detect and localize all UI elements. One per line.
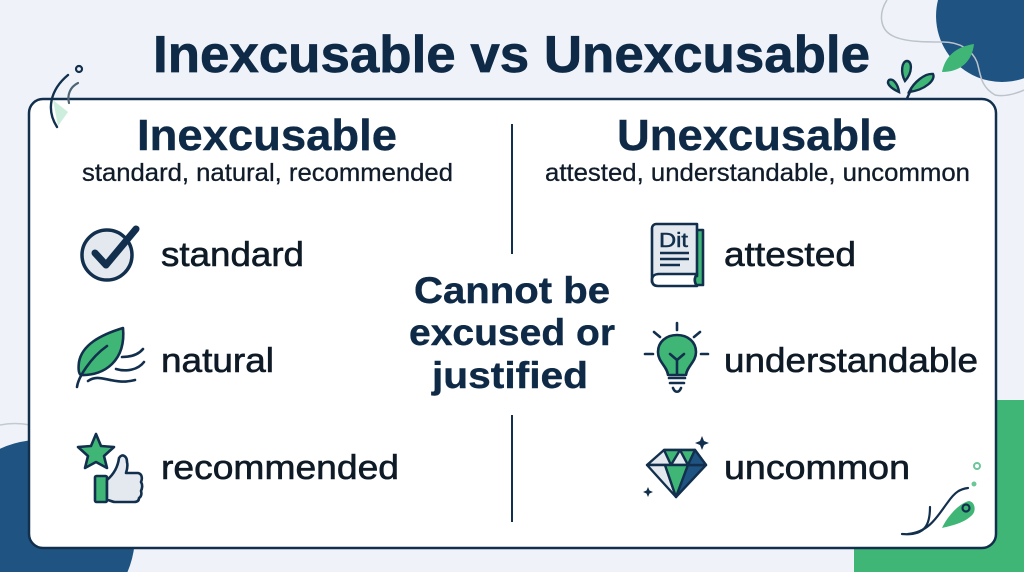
decoration: bottom-right green block — [854, 400, 1024, 572]
right column subtitle: attested, understandable, uncommon — [545, 159, 970, 187]
decoration: top-right blue circle and leaf — [881, 0, 1024, 96]
icon: dictionary book — [652, 224, 703, 286]
icon: light bulb — [645, 323, 708, 392]
label: uncommon: uncommon — [724, 449, 910, 487]
center definition text: Cannot be — [414, 270, 610, 311]
label: recommended: recommended — [161, 449, 399, 487]
title: Inexcusable vs Unexcusable — [153, 26, 870, 84]
center definition text: justified — [431, 355, 588, 396]
label: natural: natural — [161, 342, 274, 380]
left column subtitle: standard, natural, recommended — [82, 159, 453, 187]
icon: star and thumbs up — [78, 434, 142, 502]
center divider top — [511, 124, 513, 254]
decoration: top-left arcs — [51, 66, 82, 127]
decoration: sprout near the title — [888, 61, 933, 106]
left column heading: Inexcusable — [137, 111, 397, 160]
icon: dictionary book: Dit — [659, 230, 689, 252]
main card panel — [29, 99, 996, 548]
icon: leaf with wind — [77, 328, 144, 387]
center definition text: excused or — [409, 312, 615, 353]
icon: check mark in circle — [82, 229, 136, 280]
label: attested: attested — [724, 236, 856, 274]
right column heading: Unexcusable — [617, 111, 897, 160]
decoration: bottom-right sprig in card — [902, 463, 980, 534]
label: understandable: understandable — [724, 342, 978, 380]
center divider bottom — [511, 415, 513, 522]
decoration: bottom-left blue circle — [0, 424, 135, 572]
label: standard: standard — [161, 236, 304, 274]
icon: diamond with sparkles — [643, 436, 709, 497]
center definition text — [409, 270, 615, 396]
